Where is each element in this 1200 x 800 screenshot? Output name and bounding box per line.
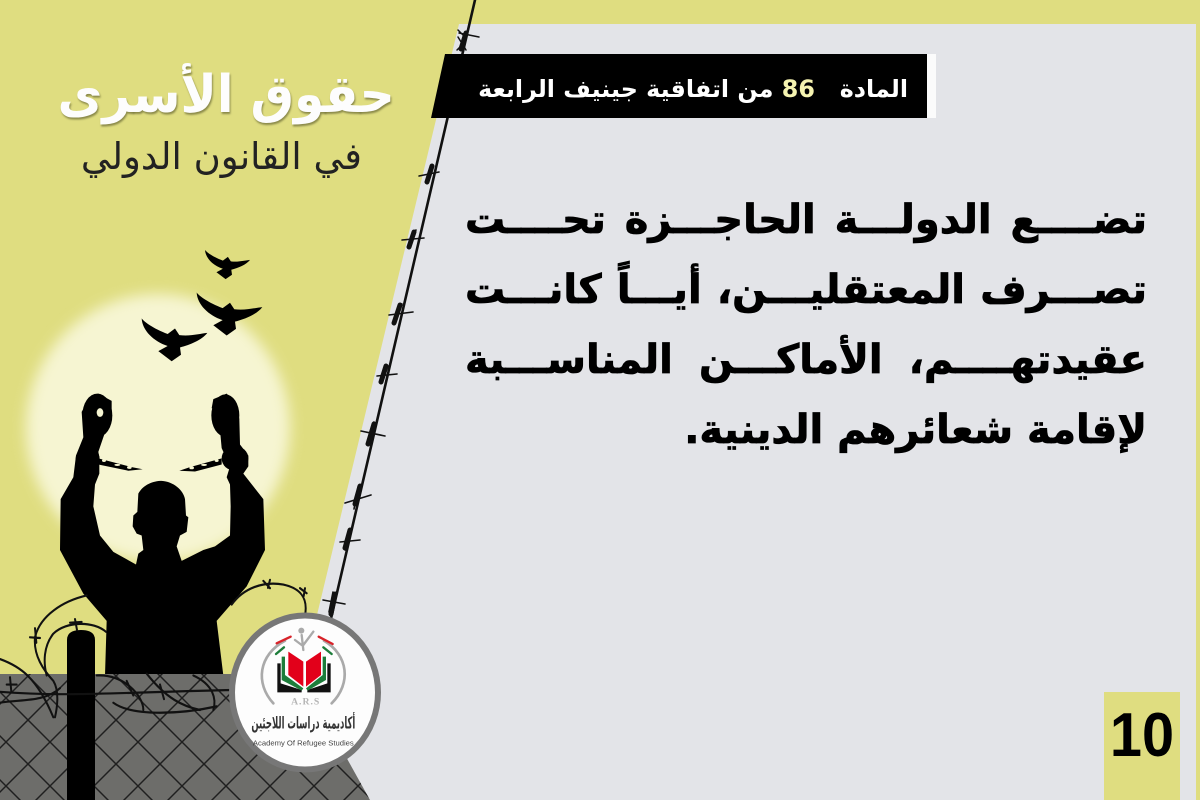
body text block xyxy=(465,197,1147,454)
illustration: chain-link fence xyxy=(0,674,370,800)
logo text: A.R.S: A.R.S xyxy=(291,697,320,708)
article heading text: المادة 86 من اتفاقية جينيف الرابعة xyxy=(478,75,908,103)
illustration: sun glow xyxy=(26,294,290,562)
icon: three doves xyxy=(142,250,262,361)
icon: broken chains xyxy=(98,458,222,471)
title: حقوق الأسرى xyxy=(58,65,395,125)
panel: page number box xyxy=(1104,692,1180,800)
icon: open book xyxy=(277,652,331,692)
logo: Academy of Refugee Studies xyxy=(232,616,378,770)
body line 3: عقيدتهــــم، الأماكـــن المناســـبة xyxy=(465,337,1147,383)
panel: grey content area xyxy=(300,24,1196,800)
icon: laurel arcs and figure xyxy=(262,628,345,703)
illustration: razor wire coils xyxy=(0,580,307,717)
illustration: prisoner silhouette xyxy=(60,394,265,675)
body line 1: تضــــع الدولـــة الحاجـــزة تحــــت xyxy=(465,197,1147,243)
page number: 10 xyxy=(1110,701,1174,770)
illustration: fence post xyxy=(67,630,95,800)
subtitle: في القانون الدولي xyxy=(81,135,362,178)
logo text: English name: Academy Of Refugee Studies xyxy=(253,738,354,747)
logo text: Arabic calligraphy: أكاديمية دراسات اللاجئين xyxy=(251,712,355,734)
icon: barbed wire divider xyxy=(323,0,479,640)
body line 2: تصـــرف المعتقليـــن، أيـــاً كانـــت xyxy=(465,267,1147,313)
illustration: prisoner, doves and fence xyxy=(0,250,370,800)
body line 4: لإقامة شعائرهم الدينية. xyxy=(684,407,1147,453)
panel: article heading bar xyxy=(431,54,936,118)
